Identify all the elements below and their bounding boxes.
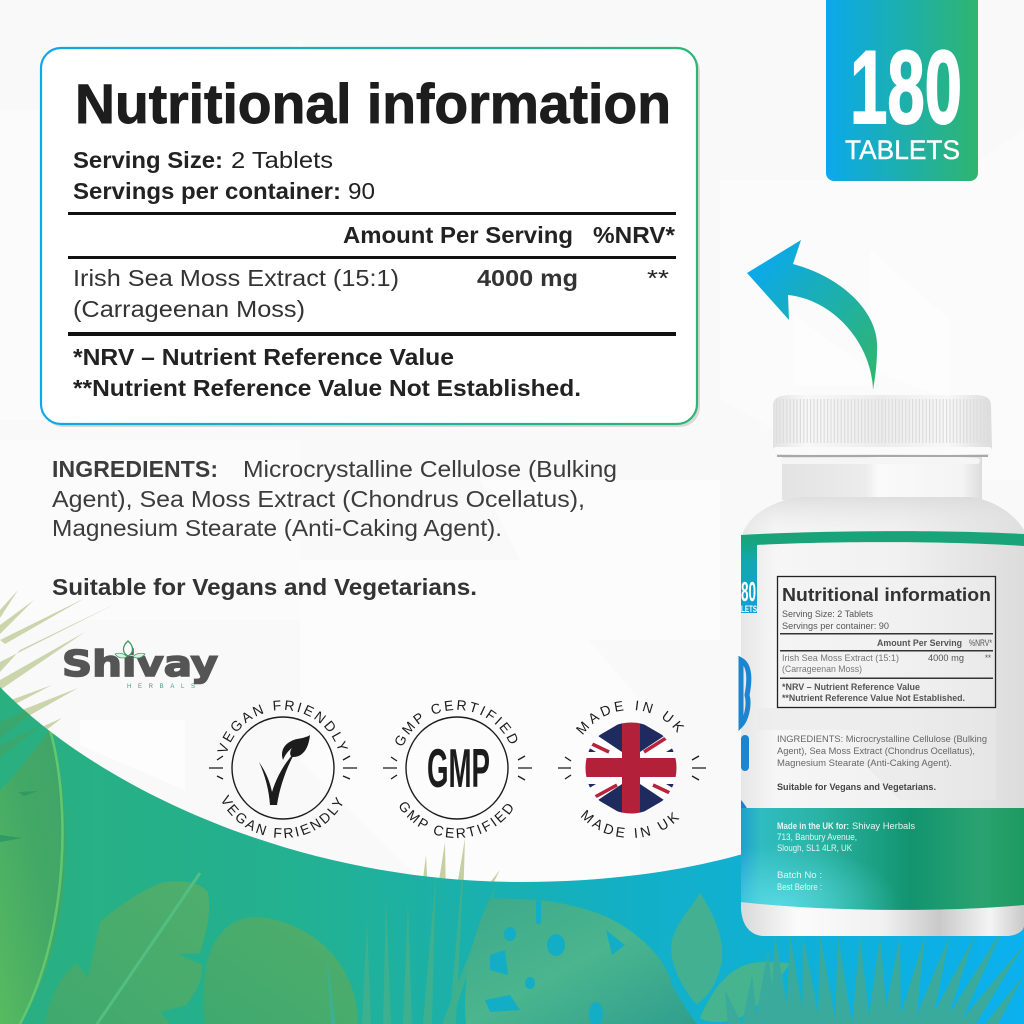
leaf: midrib <box>20 730 62 1024</box>
leaf: banana <box>45 881 209 1024</box>
label faint pattern <box>757 708 996 800</box>
leaf: small <box>700 962 790 1022</box>
serving size: 90 <box>348 178 375 204</box>
suitable for vegans: Suitable for Vegans and Vegetarians. <box>52 574 477 600</box>
footnotes: *NRV – Nutrient Reference Value <box>73 344 454 370</box>
serving size: 2 Tablets <box>231 147 333 173</box>
label serving text: Irish Sea Moss Extract (15:1) <box>782 653 899 664</box>
GMP curved text <box>395 700 518 838</box>
bottom colored band <box>741 808 1024 910</box>
body base <box>741 900 1024 936</box>
table: (Carrageenan Moss) <box>73 296 305 322</box>
GMP text: GMP <box>427 737 490 799</box>
UK curved text: MADE IN UK <box>580 810 680 838</box>
bottle address text: Best Before : <box>777 882 822 893</box>
GMP curved text: GMP CERTIFIED <box>400 802 513 838</box>
badge number: 180 <box>850 30 962 146</box>
leaf: slits <box>0 791 38 842</box>
badge shape <box>826 0 978 181</box>
bottle shoulder shading <box>741 497 1024 540</box>
label serving text <box>780 609 993 704</box>
ingredients text: Agent), Sea Moss Extract (Chondrus Ocellatus), <box>52 486 585 512</box>
footnotes <box>73 344 581 401</box>
green shoulder band <box>741 531 1024 546</box>
botanical leaves <box>0 700 1024 1024</box>
GMP circle <box>406 717 508 819</box>
logo lotus icon <box>115 641 145 658</box>
bottle cap <box>773 395 992 464</box>
badge: vegan friendly <box>209 700 357 838</box>
logo: Shivay Herbals <box>62 641 218 690</box>
left colored strip: LETS <box>741 604 757 614</box>
bottle address text: Batch No : <box>777 870 822 881</box>
bottle ingredients text: Agent), Sea Moss Extract (Chondrus Ocellatus), <box>777 746 975 757</box>
left colored strip <box>741 540 757 878</box>
badge: GMP certified <box>383 700 532 838</box>
table: 4000 mg <box>477 265 578 291</box>
label serving text: Servings per container: 90 <box>782 621 889 632</box>
leaf: pointed <box>671 893 722 1004</box>
leaf: large left <box>0 730 66 1024</box>
bottle address text <box>777 821 915 893</box>
GMP curved text: GMP CERTIFIED <box>395 700 518 746</box>
bottle ingredients text: Magnesium Stearate (Anti-Caking Agent). <box>777 758 952 769</box>
table: Amount Per Serving <box>343 222 573 248</box>
bottle address text: Slough, SL1 4LR, UK <box>777 843 853 854</box>
serving size <box>73 147 375 204</box>
bottle <box>738 395 1024 936</box>
logo subtitle: HERBALS <box>127 684 195 690</box>
footnotes: **Nutrient Reference Value Not Established. <box>73 375 581 401</box>
panel shadow <box>43 51 700 427</box>
bottle address text: Shivay Herbals <box>852 821 915 832</box>
monstera holes <box>485 900 625 1024</box>
leaf: round <box>203 917 358 1024</box>
label heading: Nutritional information <box>782 584 991 605</box>
heading: Nutritional information <box>75 72 671 135</box>
table: Irish Sea Moss Extract (15:1) <box>73 265 399 291</box>
left colored strip: 80 <box>741 576 756 607</box>
ingredients text <box>52 456 617 541</box>
bottle label box <box>778 576 996 708</box>
label serving text: ** <box>985 653 991 664</box>
green curved background <box>0 687 1024 1024</box>
vegan curved text: VEGAN FRIENDLY <box>222 794 342 838</box>
label serving text: **Nutrient Reference Value Not Established. <box>782 693 965 704</box>
vegan rays <box>209 756 357 779</box>
vegan curved text: VEGAN FRIENDLY <box>217 700 348 752</box>
badge: made in UK <box>558 700 706 838</box>
badge: 180 tablets <box>826 0 978 181</box>
panel box <box>41 48 697 424</box>
icon: UK flag <box>585 722 677 814</box>
bottle ingredients text: INGREDIENTS: Microcrystalline Cellulose (Bulking <box>777 734 987 745</box>
label serving text: Serving Size: 2 Tablets <box>782 609 873 620</box>
badge label: TABLETS <box>845 135 960 165</box>
bottle ingredients text: Suitable for Vegans and Vegetarians. <box>777 782 936 793</box>
UK curved text <box>576 700 684 838</box>
palm bottom right <box>725 936 1024 1024</box>
vegan circle <box>232 717 334 819</box>
label serving text: *NRV – Nutrient Reference Value <box>782 682 920 693</box>
table: %NRV* <box>593 222 676 248</box>
label serving text: (Carrageenan Moss) <box>782 664 862 675</box>
serving size: Servings per container: <box>73 178 341 204</box>
grass tips above curve <box>421 838 500 905</box>
label serving text: Amount Per Serving <box>877 638 962 649</box>
leaf: banana midrib <box>97 873 200 1024</box>
logo wordmark: Shivay <box>62 644 218 685</box>
bottle address text: Made in the UK for: <box>777 821 849 832</box>
bottle body <box>741 497 1024 936</box>
UK curved text: MADE IN UK <box>576 700 684 735</box>
palm fronds top left <box>0 590 117 738</box>
arrow <box>747 240 877 390</box>
serving size: Serving Size: <box>73 147 223 173</box>
leaf: monstera <box>465 898 697 1024</box>
bottle ingredients text <box>777 734 987 793</box>
table <box>68 212 676 336</box>
bottle address text: 713, Banbury Avenue, <box>777 832 857 843</box>
bottle neck <box>782 455 982 500</box>
UK rays <box>558 756 706 780</box>
label serving text: %NRV* <box>969 638 992 649</box>
table: ** <box>647 265 669 291</box>
grass blades <box>326 877 498 1024</box>
GMP rays <box>383 756 532 780</box>
panel: nutritional information <box>41 48 700 427</box>
ingredients text: INGREDIENTS: <box>52 456 218 482</box>
label serving text: 4000 mg <box>928 653 964 664</box>
icon: vegan leaf check <box>259 735 310 805</box>
vegan curved text <box>217 700 348 838</box>
ingredients text: Microcrystalline Cellulose (Bulking <box>243 456 617 482</box>
ingredients text: Magnesium Stearate (Anti-Caking Agent). <box>52 515 502 541</box>
